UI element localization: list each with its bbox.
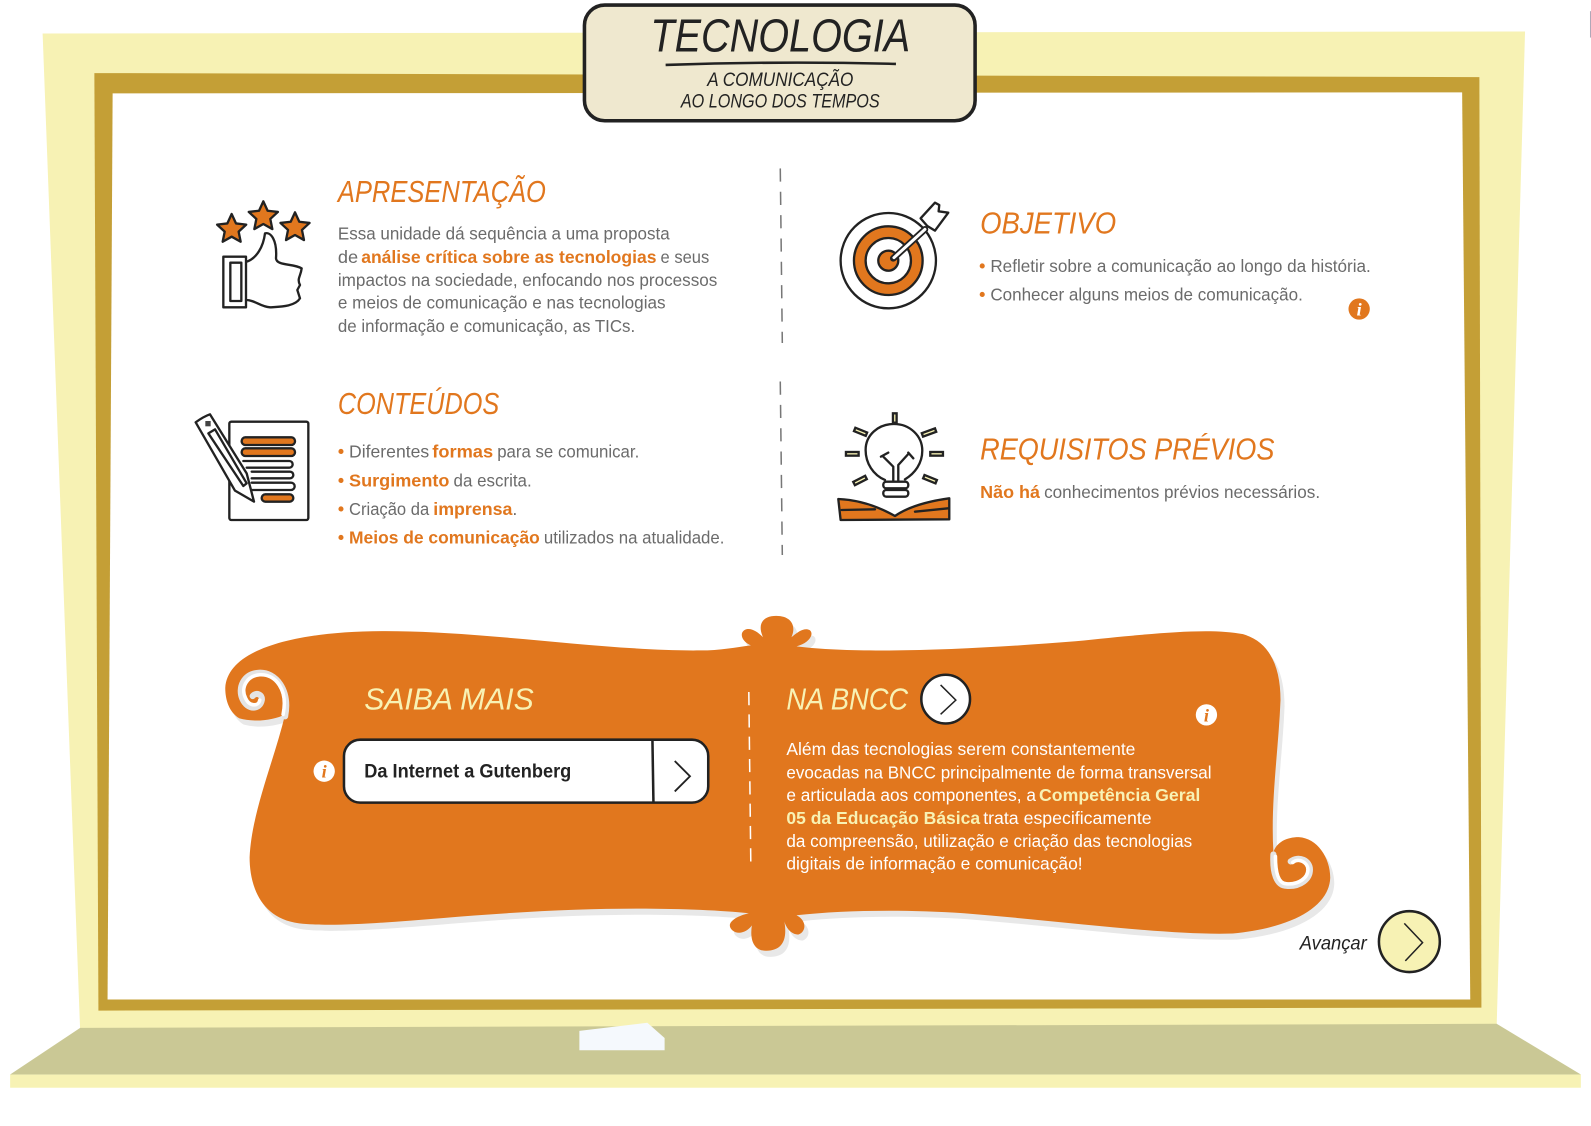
text: objetivo list — [979, 256, 1371, 304]
text: conteúdos list: • — [338, 442, 344, 462]
text: conteúdos list: da escrita. — [454, 471, 532, 491]
icon: light bulb over book — [838, 413, 949, 520]
subtitle: A COMUNICAÇÃO — [706, 69, 853, 91]
text: objetivo list: Refletir sobre a comunicação ao longo da história. — [990, 256, 1371, 276]
next button: avançar — [1299, 911, 1440, 972]
corner mark — [1590, 11, 1591, 38]
title plaque — [584, 5, 975, 121]
heading: requisitos prévios: REQUISITOS PRÉVIOS — [980, 432, 1274, 467]
section: na bncc — [786, 675, 1217, 874]
text: bncc body: da compreensão, utilização e criação das tecnologias — [786, 831, 1192, 851]
icon: info orange — [1348, 298, 1370, 320]
text: requisitos body: Não há — [980, 482, 1040, 502]
text: conteúdos list: • — [338, 527, 344, 547]
icon: thumbs up with stars — [217, 201, 310, 307]
text: apresentação body: e seus — [661, 247, 709, 267]
text: conteúdos list: imprensa — [433, 499, 513, 519]
button: round arrow — [921, 675, 970, 723]
icon: pencil and document — [196, 414, 308, 520]
section: saiba mais — [314, 682, 708, 803]
text: apresentação body — [338, 223, 717, 336]
text: conteúdos list: • — [338, 471, 344, 491]
heading: conteúdos: CONTEÚDOS — [338, 386, 499, 421]
floor ledge — [10, 1024, 1581, 1088]
panel: conteúdos — [196, 386, 724, 547]
text: bncc body: digitais de informação e comunicação! — [786, 854, 1083, 874]
title: TECNOLOGIA — [650, 10, 910, 62]
chalk piece — [579, 1023, 665, 1050]
text: bncc body: trata especificamente — [983, 808, 1152, 828]
text: objetivo list: • — [979, 284, 985, 304]
text: objetivo list: • — [979, 256, 985, 276]
text: apresentação body: e meios de comunicação e nas tecnologias — [338, 292, 666, 312]
button: da internet a gutenberg: Da Internet a Gutenberg — [364, 762, 571, 783]
text: apresentação body: Essa unidade dá sequência a uma proposta — [338, 223, 670, 243]
text: bncc body: evocadas na BNCC principalmente de forma transversal — [786, 762, 1212, 782]
heading: objetivo: OBJETIVO — [980, 206, 1116, 240]
icon: info white — [314, 761, 335, 782]
subtitle — [680, 69, 880, 113]
text: conteúdos list: Meios de comunicação — [349, 527, 540, 547]
panel: objetivo — [841, 203, 1371, 320]
text: objetivo list: Conhecer alguns meios de comunicação. — [990, 284, 1303, 304]
text: conteúdos list: formas — [432, 442, 493, 462]
text: conteúdos list: utilizados na atualidade. — [544, 527, 724, 547]
text: apresentação body: de — [338, 247, 358, 267]
text: conteúdos list — [338, 442, 724, 547]
next button: avançar: Avançar — [1299, 934, 1368, 955]
icon: info white: i — [1204, 705, 1209, 725]
icon: info white: i — [322, 762, 327, 782]
button: da internet a gutenberg — [344, 740, 708, 803]
board: white surface — [108, 92, 1470, 999]
icon: target with arrow — [841, 203, 948, 308]
title underline — [666, 63, 896, 65]
heading: apresentação: APRESENTAÇÃO — [336, 174, 546, 209]
text: conteúdos list: • — [338, 499, 344, 519]
heading: na bncc: NA BNCC — [786, 682, 909, 716]
text: bncc body: Competência Geral — [1039, 785, 1200, 805]
text: bncc body: 05 da Educação Básica — [786, 808, 980, 828]
text: requisitos body: conhecimentos prévios necessários. — [1044, 482, 1320, 502]
text: conteúdos list: Surgimento — [349, 471, 450, 491]
icon: info white — [1196, 704, 1217, 725]
board: gold frame — [94, 73, 1481, 1011]
text: conteúdos list: para se comunicar. — [497, 442, 639, 462]
panel: requisitos prévios — [838, 413, 1320, 520]
text: bncc body: e articulada aos componentes, a — [786, 785, 1036, 805]
subtitle: AO LONGO DOS TEMPOS — [680, 92, 880, 113]
text: conteúdos list: . — [512, 499, 517, 519]
text: bncc body — [786, 739, 1212, 874]
heading: saiba mais: SAIBA MAIS — [364, 682, 534, 716]
text: conteúdos list: Diferentes — [349, 442, 429, 462]
text: apresentação body: de informação e comunicação, as TICs. — [338, 316, 635, 336]
text: apresentação body: impactos na sociedade, enfocando nos processos — [338, 270, 717, 290]
text: apresentação body: análise crítica sobre as tecnologias — [361, 247, 657, 267]
icon: info orange: i — [1357, 300, 1362, 320]
text: conteúdos list: Criação da — [349, 499, 429, 519]
panel: apresentação — [217, 174, 717, 336]
panel: orange scroll — [225, 616, 1334, 957]
text: bncc body: Além das tecnologias serem constantemente — [786, 739, 1136, 759]
